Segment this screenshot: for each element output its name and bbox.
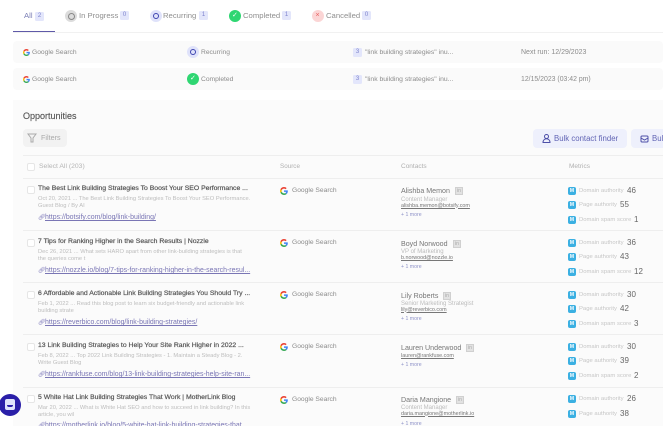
search row: recurring bbox=[13, 41, 663, 63]
contact bbox=[401, 187, 470, 218]
metrics: M bbox=[570, 188, 574, 194]
button: Bulk contact finder bbox=[533, 129, 627, 148]
contact: Content Manager bbox=[401, 196, 447, 202]
tab: Completed: ✓ bbox=[232, 12, 238, 19]
metrics: 30 bbox=[627, 342, 636, 351]
tab: Cancelled bbox=[312, 10, 371, 22]
snippet: Feb 8, 2022 ... Top 2022 Link Building Strategies - 1. Maintain a Steady Blog - 2. bbox=[38, 353, 242, 359]
source: Google Search bbox=[292, 239, 337, 246]
tab bar bbox=[13, 10, 371, 32]
source: Google Search bbox=[292, 291, 337, 298]
metrics: 55 bbox=[620, 200, 629, 209]
contact: lauren@rankfuse.com bbox=[401, 352, 454, 358]
title: The Best Link Building Strategies To Boost Your SEO Performance ... bbox=[38, 185, 248, 192]
metrics: 3 bbox=[634, 319, 638, 328]
metrics: M bbox=[570, 358, 574, 364]
table header: Contacts bbox=[401, 163, 427, 170]
table header: Metrics bbox=[569, 163, 590, 170]
contact: Alishba Memon bbox=[401, 187, 450, 195]
snippet: Dec 26, 2021 ... What sets HARO apart from other link-building strategies is that bbox=[38, 249, 242, 255]
source bbox=[280, 395, 338, 405]
metrics: Domain authority bbox=[579, 240, 624, 246]
metrics: M bbox=[570, 268, 574, 274]
snippet: the queries come t bbox=[38, 256, 85, 262]
status: Completed: ✓ bbox=[190, 75, 196, 82]
snippet bbox=[38, 249, 242, 262]
link: https://reverbico.com/blog/link-building-strategies/ bbox=[45, 319, 197, 326]
metrics: Page authority bbox=[579, 306, 617, 312]
metrics: Domain authority bbox=[579, 396, 624, 402]
metrics: 42 bbox=[620, 304, 629, 313]
metrics bbox=[568, 342, 638, 380]
opportunity row 5 bbox=[27, 394, 636, 426]
search row: completed bbox=[13, 68, 663, 90]
metrics: Domain authority bbox=[579, 188, 624, 194]
tab: Cancelled: 0 bbox=[365, 12, 368, 18]
metrics: Domain spam score bbox=[579, 269, 631, 275]
metrics: 38 bbox=[620, 409, 629, 418]
title: 6 Affordable and Actionable Link Building Strategies You Should Try ... bbox=[38, 290, 250, 297]
contact: in bbox=[458, 397, 462, 403]
opportunity row 1 bbox=[27, 185, 638, 224]
title: 5 White Hat Link Building Strategies That Work | MotherLink Blog bbox=[38, 394, 235, 401]
table header bbox=[27, 163, 590, 171]
metrics: M bbox=[570, 320, 574, 326]
query: "link building strategies" inu... bbox=[365, 76, 453, 83]
query bbox=[353, 48, 453, 57]
tab: Recurring: Recurring bbox=[163, 11, 196, 20]
metrics: M bbox=[570, 240, 574, 246]
contact bbox=[401, 394, 481, 426]
metrics: Domain authority bbox=[579, 344, 624, 350]
metrics: M bbox=[570, 292, 574, 298]
metrics: M bbox=[570, 202, 574, 208]
metrics: 26 bbox=[627, 394, 636, 403]
metrics: M bbox=[570, 344, 574, 350]
metrics: 43 bbox=[620, 252, 629, 261]
metrics bbox=[568, 290, 638, 328]
tab: All: All bbox=[24, 11, 33, 20]
metrics: 46 bbox=[627, 186, 636, 195]
opportunity row 3 bbox=[27, 290, 638, 328]
contact: alishba.memon@botsify.com bbox=[401, 202, 470, 208]
opportunity row 3: 🔗︎ bbox=[38, 320, 46, 326]
contact: Senior Marketing Strategist bbox=[401, 300, 473, 306]
contact: b.norwood@nozzle.io bbox=[401, 254, 453, 260]
metrics: M bbox=[570, 410, 574, 416]
snippet bbox=[38, 353, 242, 366]
snippet: Oct 20, 2021 ... The Best Link Building Strategies To Boost Your SEO Performance. bbox=[38, 196, 250, 202]
opportunity row 4: 🔗︎ bbox=[38, 372, 46, 378]
source bbox=[280, 291, 337, 299]
metrics: M bbox=[570, 372, 574, 378]
opportunity row 1: 🔗︎ bbox=[38, 215, 46, 221]
next run date: Next run: 12/29/2023 bbox=[521, 48, 586, 56]
metrics bbox=[568, 393, 640, 418]
source bbox=[280, 187, 337, 195]
contact bbox=[401, 344, 474, 368]
contact: Lily Roberts bbox=[401, 292, 438, 300]
status: Recurring bbox=[187, 46, 230, 58]
metrics bbox=[568, 238, 643, 276]
metrics: 1 bbox=[634, 215, 638, 224]
metrics: Page authority bbox=[579, 411, 617, 417]
snippet bbox=[38, 301, 244, 314]
metrics: 36 bbox=[627, 238, 636, 247]
tab: Recurring: 1 bbox=[202, 12, 205, 18]
snippet bbox=[38, 405, 250, 418]
tab: Completed bbox=[229, 10, 291, 22]
metrics bbox=[568, 186, 638, 224]
contact: in bbox=[445, 293, 449, 299]
link: https://rankfuse.com/blog/13-link-building-strategies-help-site-ran... bbox=[45, 371, 250, 378]
snippet: Guest Blog / By AI bbox=[38, 203, 85, 209]
metrics: Page authority bbox=[579, 254, 617, 260]
contact bbox=[401, 240, 461, 270]
tab: Completed: Completed bbox=[243, 11, 280, 20]
contact: VP of Marketing bbox=[401, 248, 444, 254]
contact: Boyd Norwood bbox=[401, 240, 448, 248]
source bbox=[280, 239, 337, 247]
metrics: Domain spam score bbox=[579, 217, 631, 223]
title: 7 Tips for Ranking Higher in the Search Results | Nozzle bbox=[38, 238, 209, 245]
button: Filters: Filters bbox=[41, 133, 61, 142]
metrics: Domain authority bbox=[579, 292, 624, 298]
query: 3 bbox=[356, 76, 359, 82]
metrics: Domain spam score bbox=[579, 373, 631, 379]
snippet: Feb 1, 2022 ... Read this blog post to learn six budget-friendly and actionable link bbox=[38, 301, 244, 307]
metrics: 39 bbox=[620, 356, 629, 365]
metrics: 12 bbox=[634, 267, 643, 276]
table header: Select All (203) bbox=[39, 163, 85, 170]
tab: All: 2 bbox=[38, 13, 41, 19]
contact: Lauren Underwood bbox=[401, 344, 461, 352]
source: Google Search: Google Search bbox=[32, 76, 77, 83]
contact: daria.mangione@motherlink.io bbox=[401, 410, 474, 416]
metrics: Domain spam score bbox=[579, 321, 631, 327]
source bbox=[280, 343, 337, 351]
metrics: Page authority bbox=[579, 358, 617, 364]
tab: In Progress bbox=[65, 10, 129, 22]
metrics: M bbox=[570, 306, 574, 312]
contact: + 1 more bbox=[401, 212, 422, 218]
contact bbox=[401, 292, 474, 322]
tab: Completed: 1 bbox=[285, 12, 288, 18]
query bbox=[353, 75, 453, 84]
opportunity row 4 bbox=[27, 342, 638, 380]
heading: Opportunities: Opportunities bbox=[23, 111, 77, 121]
tab: In Progress: In Progress bbox=[79, 11, 118, 20]
completion date: 12/15/2023 (03:42 pm) bbox=[521, 76, 591, 82]
opportunity row 2 bbox=[27, 238, 643, 276]
metrics: 2 bbox=[634, 371, 638, 380]
status: Completed: Completed bbox=[201, 76, 233, 83]
title: 13 Link Building Strategies to Help Your Site Rank Higher in 2022 ... bbox=[38, 342, 244, 349]
tab: Cancelled: × bbox=[316, 12, 320, 19]
query: 3 bbox=[356, 49, 359, 55]
opportunity row 2: 🔗︎ bbox=[38, 268, 46, 274]
contact: in bbox=[468, 345, 472, 351]
button: Bulk contact finder: Bulk contact finder bbox=[554, 134, 618, 143]
metrics: M bbox=[570, 216, 574, 222]
tab: Recurring bbox=[150, 10, 208, 22]
link: https://botsify.com/blog/link-building/ bbox=[45, 214, 156, 221]
metrics: M bbox=[570, 396, 574, 402]
contact: + 1 more bbox=[401, 362, 422, 368]
source: Google Search bbox=[292, 343, 337, 350]
metrics: M bbox=[570, 254, 574, 260]
snippet: article, you wil bbox=[38, 412, 74, 418]
metrics: Page authority bbox=[579, 202, 617, 208]
query: "link building strategies" inu... bbox=[365, 49, 453, 56]
table header: Source bbox=[280, 163, 300, 170]
source: Google Search: Google Search bbox=[32, 49, 77, 56]
button: Filters bbox=[23, 129, 67, 147]
panel: opportunities bbox=[13, 100, 663, 426]
tab: All bbox=[13, 11, 55, 32]
link: https://nozzle.io/blog/7-tips-for-ranking-higher-in-the-search-resul... bbox=[45, 267, 250, 274]
status: Recurring: Recurring bbox=[201, 49, 230, 56]
contact: + 1 more bbox=[401, 316, 422, 322]
source: Google Search bbox=[292, 187, 337, 194]
contact: lily@reverbico.com bbox=[401, 306, 447, 312]
contact: + 1 more bbox=[401, 264, 422, 270]
snippet bbox=[38, 196, 250, 209]
snippet: building strate bbox=[38, 308, 74, 314]
snippet: Mar 20, 2022 ... What is White Hat SEO and how to succeed in link building? In this bbox=[38, 405, 250, 411]
snippet: Write Guest Blog bbox=[38, 360, 81, 366]
metrics: 30 bbox=[627, 290, 636, 299]
contact: Content Manager bbox=[401, 404, 447, 410]
tab: In Progress: 0 bbox=[123, 12, 126, 18]
contact: in bbox=[455, 241, 459, 247]
source: Google Search bbox=[292, 396, 337, 403]
contact: Daria Mangione bbox=[401, 396, 451, 404]
chat widget button bbox=[0, 394, 21, 416]
contact: in bbox=[457, 188, 461, 194]
tab: Cancelled: Cancelled bbox=[326, 11, 360, 20]
status: Completed bbox=[187, 73, 233, 85]
button: Bulk email bbox=[631, 129, 663, 148]
